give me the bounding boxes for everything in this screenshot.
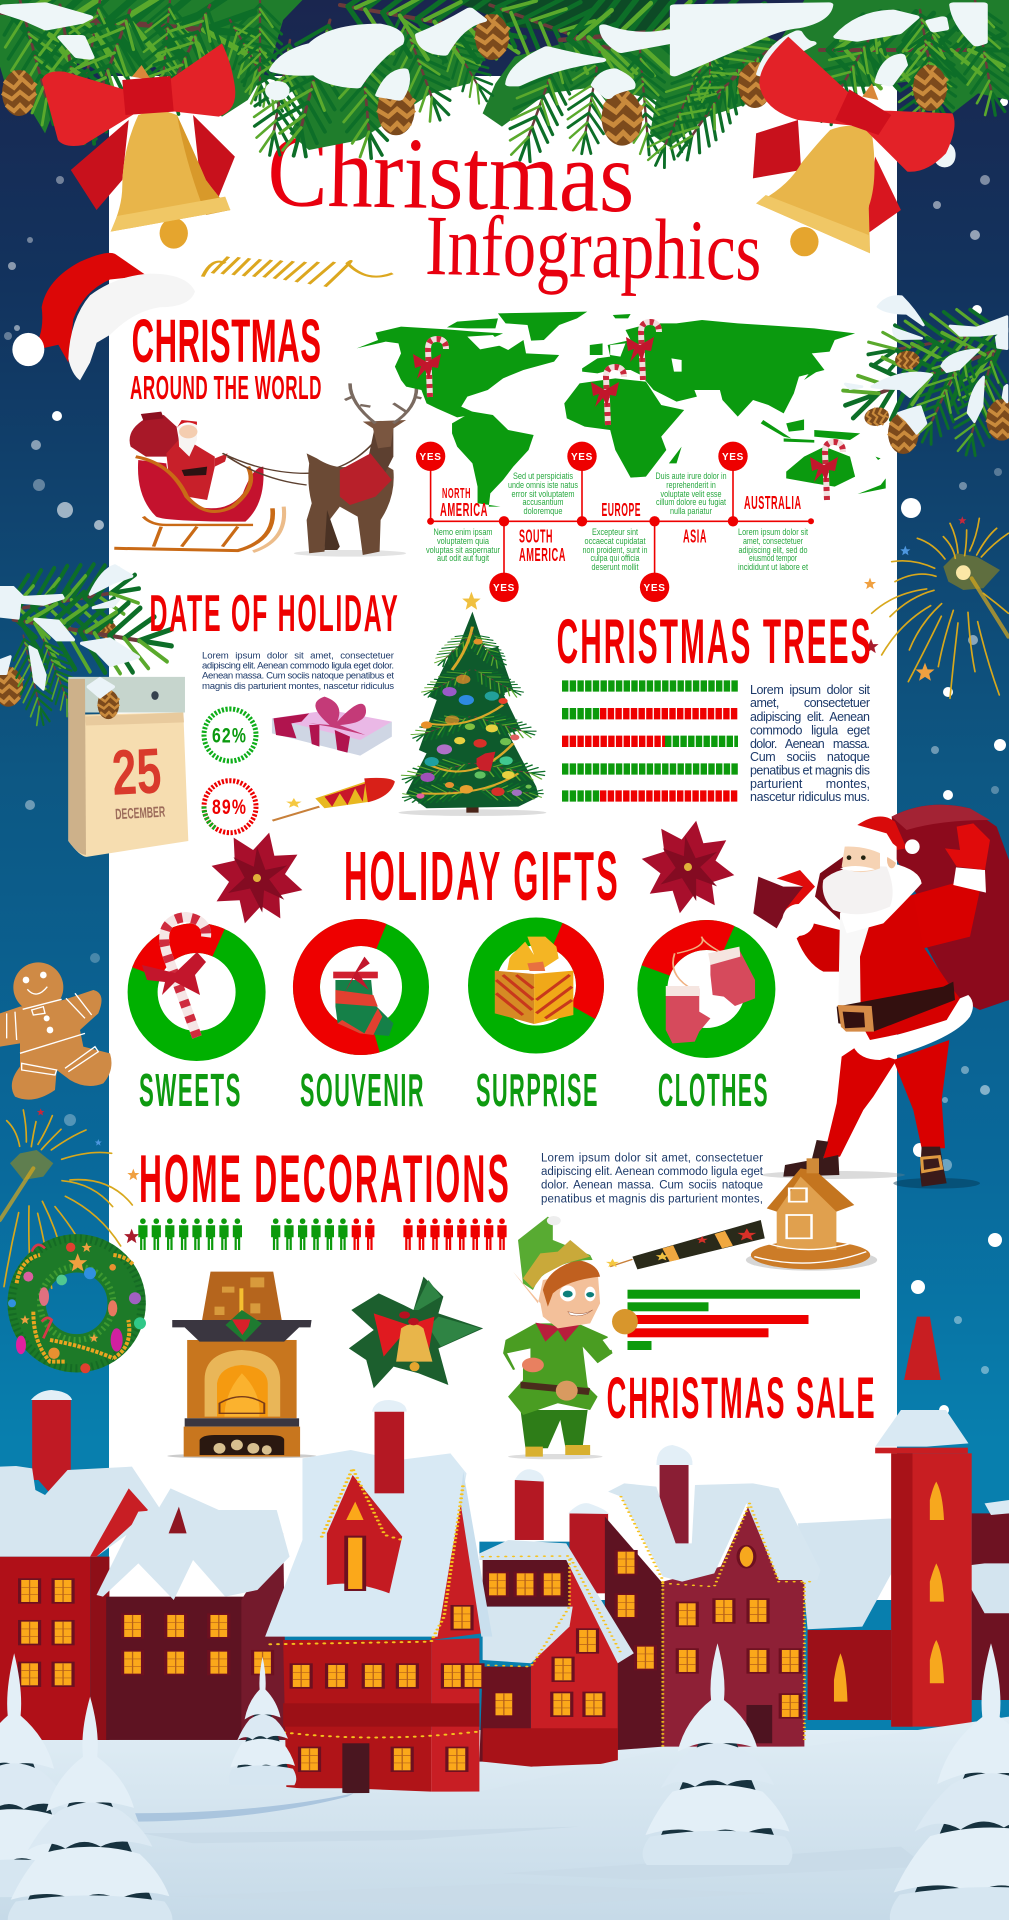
text: christmas trees: Lorem ipsum dolor sit: [750, 683, 871, 697]
text: christmas trees: dolor. Aenean massa.: [750, 737, 870, 751]
text: christmas trees: amet, consectetuer: [750, 696, 870, 710]
icon: christmas tree: [398, 592, 548, 816]
icon: fireplace: [167, 1272, 317, 1459]
region labels: AMERICA: [519, 544, 566, 565]
region text: europe: occaecat cupidatat: [584, 536, 646, 546]
region text: north america: [426, 527, 500, 563]
stat ring: 89 percent: [204, 781, 256, 833]
text: christmas trees: penatibus et magnis dis: [750, 764, 870, 778]
text: christmas trees: commodo ligula eget: [750, 724, 871, 738]
maroon house: [605, 1445, 820, 1750]
region text: asia: Duis aute irure dolor in: [656, 471, 726, 481]
timeline of regions: YES: [571, 452, 593, 463]
region text: europe: deserunt mollit: [592, 562, 639, 572]
icon: right bell with bow: [753, 37, 955, 256]
text: HOLIDAY GIFTS: [344, 837, 620, 915]
text: AUSTRALIA: [744, 492, 802, 513]
village: snow drift: [0, 1717, 1009, 1920]
village: ground snow: [0, 1730, 1009, 1920]
text: home decorations: adipiscing elit. Aenean commodo ligula eget: [541, 1166, 764, 1178]
region labels: ASIA: [683, 526, 707, 547]
region text: south america: accusantium: [522, 497, 564, 507]
region text: north america: voluptas sit aspernatur: [426, 545, 500, 555]
stat ring: 62 percent: 62%: [212, 725, 247, 748]
region text: europe: [582, 527, 648, 572]
icon: elf: [503, 1216, 638, 1459]
text: date of holiday: [202, 650, 395, 692]
stat ring: 62 percent: [204, 709, 256, 761]
icon: poinsettia right: [634, 813, 742, 921]
donut: sweets: [142, 917, 251, 1046]
text: CLOTHES: [658, 1064, 769, 1116]
text: date of holiday: adipiscing elit. Aenean commodo ligula eget dolor.: [202, 660, 394, 671]
region text: asia: voluptate velit esse: [660, 489, 722, 499]
region labels: SOUTH: [519, 526, 553, 547]
region text: asia: nulla pariatur: [670, 506, 712, 516]
icon: firecracker: [606, 1220, 765, 1269]
icon: left bell with bow: [42, 43, 235, 249]
region text: asia: [656, 471, 726, 516]
title: Infographics: [425, 197, 762, 299]
icon: holly with bell: [349, 1277, 483, 1388]
region text: australia: Lorem ipsum dolor sit: [738, 527, 808, 537]
timeline of regions: YES: [644, 583, 666, 594]
region text: europe: culpa qui officia: [590, 553, 640, 563]
right fir branch: [833, 296, 1009, 461]
calendar: 25 december: DECEMBER: [115, 804, 166, 823]
heading: christmas around the world: CHRISTMAS: [132, 307, 322, 375]
map candy canes: [413, 322, 843, 500]
region labels: NORTH: [442, 485, 471, 502]
icon: santa in sleigh: [114, 412, 373, 552]
category labels: SWEETS: [139, 1064, 242, 1116]
icon: reindeer: [294, 383, 421, 557]
category labels: SOUVENIR: [300, 1064, 425, 1116]
region text: asia: cillum dolore eu fugiat: [656, 497, 726, 507]
text: christmas trees: adipiscing elit. Aenean: [750, 710, 870, 724]
icon: gingerbread man: [0, 962, 111, 1100]
snow on left branch: [0, 566, 139, 697]
region labels: [440, 485, 802, 565]
region text: australia: adipiscing elit, sed do: [738, 545, 808, 555]
house far right and tower: [798, 1317, 1009, 1727]
icon: santa hat: [12, 253, 195, 380]
icon: pink gift box: [272, 697, 392, 756]
stat ring: 89 percent: 89%: [212, 796, 247, 819]
big front house: [265, 1400, 492, 1793]
region text: north america: voluptatem quia: [437, 536, 489, 546]
text: HOME DECORATIONS: [139, 1141, 511, 1217]
chart: sale bars: [628, 1290, 860, 1350]
region labels: AMERICA: [440, 499, 488, 520]
region text: australia: amet, consectetuer: [743, 536, 803, 546]
snow on garland: [4, 5, 983, 165]
category labels: [139, 1064, 769, 1116]
region text: south america: error sit voluptatem: [512, 489, 574, 499]
heading: christmas around the world: [130, 307, 322, 407]
mid house: [479, 1540, 634, 1767]
text: DATE OF HOLIDAY: [150, 585, 400, 643]
region text: asia: reprehenderit in: [666, 480, 716, 490]
region text: australia: [738, 527, 808, 572]
text: date of holiday: Aenean massa. Cum sociis natoque penatibus et: [202, 670, 394, 681]
left fir branch: [0, 555, 176, 730]
timeline of regions: YES: [420, 452, 442, 463]
text: christmas trees: nascetur ridiculus mus.: [750, 790, 870, 804]
category labels: SURPRISE: [476, 1064, 599, 1116]
calendar: 25 december: [68, 677, 188, 857]
region text: north america: Nemo enim ipsam: [434, 527, 492, 537]
icon: red rocket: [272, 778, 395, 821]
text: home decorations: penatibus et magnis dis parturient montes,: [541, 1194, 763, 1206]
region text: north america: aut odit aut fugit: [437, 553, 489, 563]
timeline of regions: [416, 442, 814, 602]
region labels: EUROPE: [602, 499, 641, 520]
garland: top fir branches: [0, 0, 1009, 175]
world map: [357, 312, 886, 507]
region text: australia: incididunt ut labore et: [738, 562, 808, 572]
fireworks right: [863, 516, 1008, 698]
icon: christmas wreath: [8, 1238, 146, 1373]
pine cones in garland: [2, 14, 947, 146]
gap of sky behind houses: [479, 1542, 573, 1555]
timeline of regions: YES: [493, 583, 515, 594]
donut: surprise: [482, 932, 590, 1040]
house 2: [97, 1488, 290, 1740]
chart: christmas trees progress bars: [562, 686, 738, 796]
panel: white content sheet: [109, 76, 897, 1600]
region text: europe: non proident, sunt in: [582, 545, 648, 555]
text: date of holiday: Lorem ipsum dolor sit amet, consectetuer: [202, 650, 395, 661]
heading: christmas around the world: AROUND THE WORLD: [130, 370, 322, 407]
house left: [0, 1390, 161, 1740]
chimneys middle: [515, 1469, 608, 1593]
village: snowy fir trees: [0, 1643, 1009, 1920]
text: christmas trees: Cum sociis natoque: [750, 750, 870, 764]
text: christmas trees: [750, 683, 871, 804]
village: snowy houses: [0, 1317, 1009, 1793]
text: date of holiday: magnis dis parturient montes, nascetur ridiculus: [202, 681, 394, 692]
icon: gingerbread house: [746, 1158, 877, 1271]
region text: south america: doloremque: [524, 506, 562, 516]
region text: south america: Sed ut perspiciatis: [513, 471, 573, 481]
title: Christmas: [267, 115, 636, 234]
region text: south america: [508, 471, 578, 516]
donut: souvenir: [306, 932, 416, 1042]
pictogram: people groups: [138, 1218, 507, 1250]
text: home decorations: dolor. Aenean massa. Cum sociis natoque: [541, 1180, 763, 1192]
donut: clothes: [652, 935, 760, 1043]
region text: south america: unde omnis iste natus: [508, 480, 578, 490]
falling snow on sky: [4, 98, 1008, 1415]
timeline of regions: YES: [722, 452, 744, 463]
text: home decorations: Lorem ipsum dolor sit amet, consectetuer: [541, 1152, 763, 1164]
text: christmas trees: parturient montes,: [750, 777, 870, 791]
icon: golden spring ribbon: [203, 257, 393, 287]
calendar: 25 december: 25: [110, 734, 163, 809]
region text: europe: Excepteur sint: [592, 527, 638, 537]
icon: poinsettia left: [199, 820, 315, 936]
text: home decorations: [541, 1152, 764, 1206]
fireworks left: [0, 1108, 139, 1288]
region text: australia: eiusmod tempor: [749, 553, 797, 563]
title: [267, 115, 762, 299]
icon: santa with sack: [753, 805, 1009, 1189]
